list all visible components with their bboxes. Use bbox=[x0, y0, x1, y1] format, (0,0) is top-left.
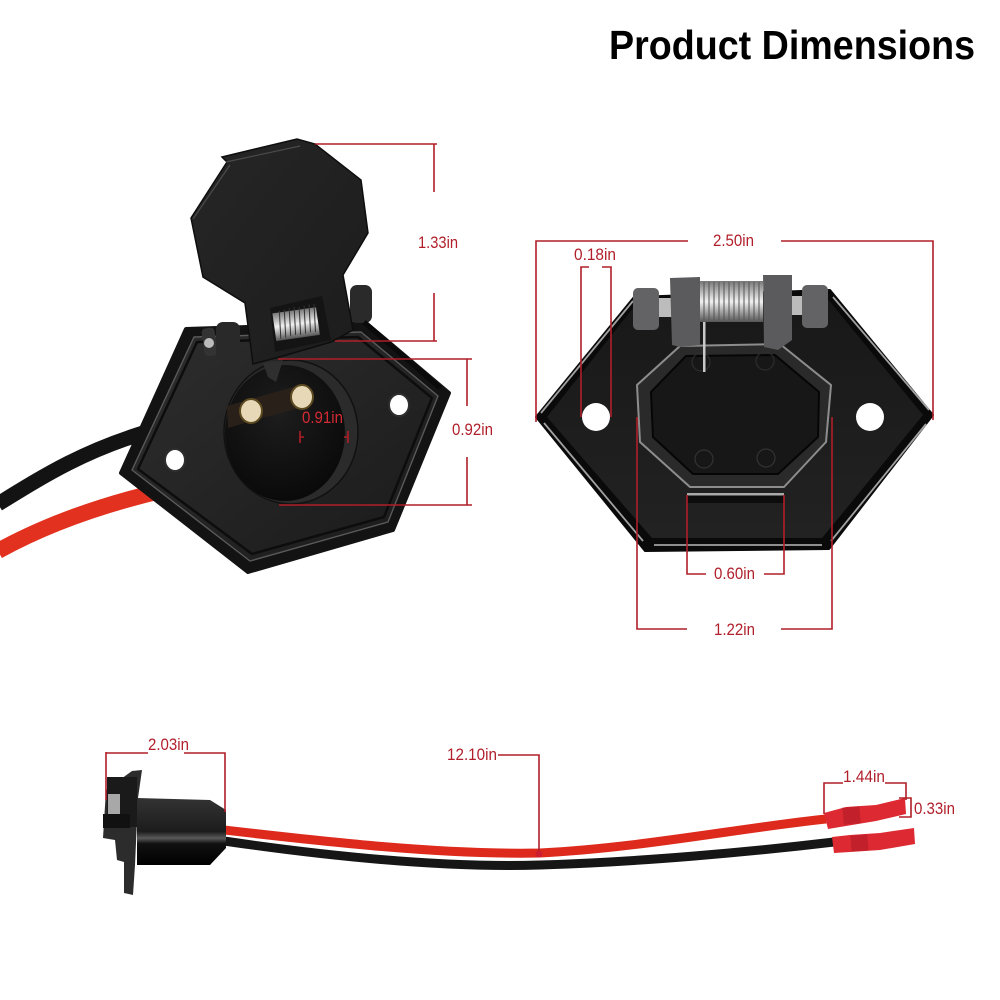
octagonal raised ring bbox=[637, 344, 831, 503]
mounting holes bbox=[582, 403, 884, 431]
product photo: back of socket bbox=[536, 275, 933, 551]
red crimp connector bottom bbox=[832, 828, 915, 853]
dimension: lid height 1.33in: 1.33in bbox=[418, 233, 458, 252]
lid bbox=[191, 139, 368, 364]
dimension: ring width 1.22in bbox=[637, 417, 832, 639]
product photo: side view with cable bbox=[103, 770, 915, 895]
socket barrel bbox=[103, 770, 226, 895]
dimension: connector length 1.44in: 1.44in bbox=[843, 767, 885, 786]
dimension: connector diameter 0.33in: 0.33in bbox=[914, 799, 955, 818]
black cable bbox=[0, 431, 150, 504]
spring bbox=[270, 296, 331, 352]
title: Product Dimensions bbox=[609, 22, 975, 68]
dimension: tab width 0.60in bbox=[687, 495, 784, 583]
black wire bbox=[224, 841, 834, 865]
dimension: hole 0.91in bbox=[300, 408, 348, 443]
dimension: overall width 2.50in: 2.50in bbox=[713, 231, 754, 250]
hexagonal base plate bbox=[121, 323, 449, 572]
red wire bbox=[224, 819, 826, 853]
hinge knobs bbox=[201, 285, 440, 388]
dimension: socket length 2.03in bbox=[106, 735, 225, 812]
dimension: socket length 2.03in: 2.03in bbox=[148, 735, 189, 754]
hinge and spring bbox=[633, 275, 828, 372]
dimension: overall width 2.50in bbox=[536, 231, 933, 422]
dimension: face height 0.92in: 0.92in bbox=[452, 420, 493, 439]
lid edge ridge bbox=[193, 146, 300, 219]
dimension: tab width 0.60in: 0.60in bbox=[714, 564, 755, 583]
dimension: hole 0.91in: 0.91in bbox=[302, 408, 343, 427]
dimension: connector length 1.44in bbox=[824, 767, 906, 814]
dimension: hole span 0.18in bbox=[574, 245, 616, 417]
red cable bbox=[0, 490, 165, 551]
dimension: lid height 1.33in bbox=[315, 144, 458, 341]
dimension: ring width 1.22in: 1.22in bbox=[714, 620, 755, 639]
dimension: face height 0.92in bbox=[278, 359, 493, 505]
product photo: socket with open lid bbox=[0, 139, 449, 572]
hexagonal back plate bbox=[536, 290, 933, 551]
red crimp connector top bbox=[824, 798, 906, 829]
socket opening with pins bbox=[224, 360, 358, 504]
dimension: connector diameter 0.33in bbox=[899, 798, 955, 818]
dimension: cable length 12.10in bbox=[447, 745, 542, 858]
mounting holes bbox=[165, 394, 409, 471]
dimension: hole span 0.18in: 0.18in bbox=[574, 245, 616, 264]
dimension: cable length 12.10in: 12.10in bbox=[447, 745, 497, 764]
